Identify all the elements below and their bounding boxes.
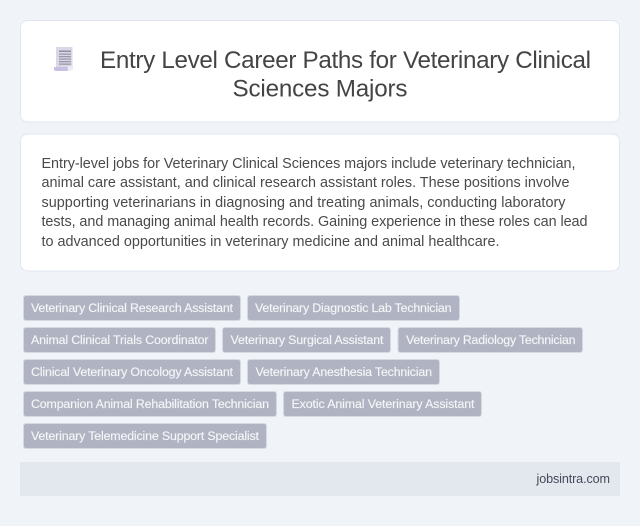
tag: Animal Clinical Trials Coordinator xyxy=(24,328,216,352)
title: Entry Level Career Paths for Veterinary Clinical xyxy=(100,47,591,74)
title xyxy=(100,47,591,102)
tag: Veterinary Telemedicine Support Specialist: Veterinary Telemedicine Support Specialist xyxy=(31,429,260,443)
icon: document scroll xyxy=(54,47,73,71)
tag: Exotic Animal Veterinary Assistant: Exotic Animal Veterinary Assistant xyxy=(292,397,475,411)
description text: Entry-level jobs for Veterinary Clinical Sciences majors include veterinary technician, xyxy=(42,156,576,172)
description text xyxy=(42,156,588,250)
tag: Clinical Veterinary Oncology Assistant xyxy=(24,360,240,384)
tag: Companion Animal Rehabilitation Technician: Companion Animal Rehabilitation Technician xyxy=(31,397,269,411)
tag: Veterinary Radiology Technician: Veterinary Radiology Technician xyxy=(406,333,576,347)
description text: supporting veterinarians in diagnosing and treating animals, conducting laboratory xyxy=(42,195,566,211)
tag: Exotic Animal Veterinary Assistant xyxy=(284,392,482,416)
description text: animal care assistant, and clinical research assistant roles. These positions involve xyxy=(42,175,570,191)
footer source text: jobsintra.com xyxy=(536,472,610,486)
description text: to advanced opportunities in veterinary medicine and animal healthcare. xyxy=(42,234,500,250)
panel: description card xyxy=(20,134,620,271)
panel: career tags xyxy=(24,296,582,448)
tag: Veterinary Diagnostic Lab Technician xyxy=(248,296,460,320)
tag: Companion Animal Rehabilitation Technician xyxy=(24,392,276,416)
tag: Veterinary Radiology Technician xyxy=(398,328,582,352)
tag: Veterinary Diagnostic Lab Technician: Veterinary Diagnostic Lab Technician xyxy=(255,301,452,315)
title: Sciences Majors xyxy=(232,76,408,102)
tag: Veterinary Clinical Research Assistant xyxy=(24,296,240,320)
tag: Clinical Veterinary Oncology Assistant: Clinical Veterinary Oncology Assistant xyxy=(31,365,234,379)
description text: tests, and managing animal health records. Gaining experience in these roles can lead xyxy=(42,214,588,230)
panel: title card xyxy=(20,20,620,122)
footer bar xyxy=(20,462,620,496)
tag: Veterinary Surgical Assistant: Veterinary Surgical Assistant xyxy=(230,333,384,347)
tag: Animal Clinical Trials Coordinator: Animal Clinical Trials Coordinator xyxy=(31,333,208,347)
tag: Veterinary Anesthesia Technician: Veterinary Anesthesia Technician xyxy=(256,365,432,379)
tag: Veterinary Surgical Assistant xyxy=(222,328,390,352)
tag: Veterinary Anesthesia Technician xyxy=(248,360,440,384)
tag: Veterinary Telemedicine Support Specialist xyxy=(24,424,266,448)
tag: Veterinary Clinical Research Assistant: Veterinary Clinical Research Assistant xyxy=(31,301,234,315)
